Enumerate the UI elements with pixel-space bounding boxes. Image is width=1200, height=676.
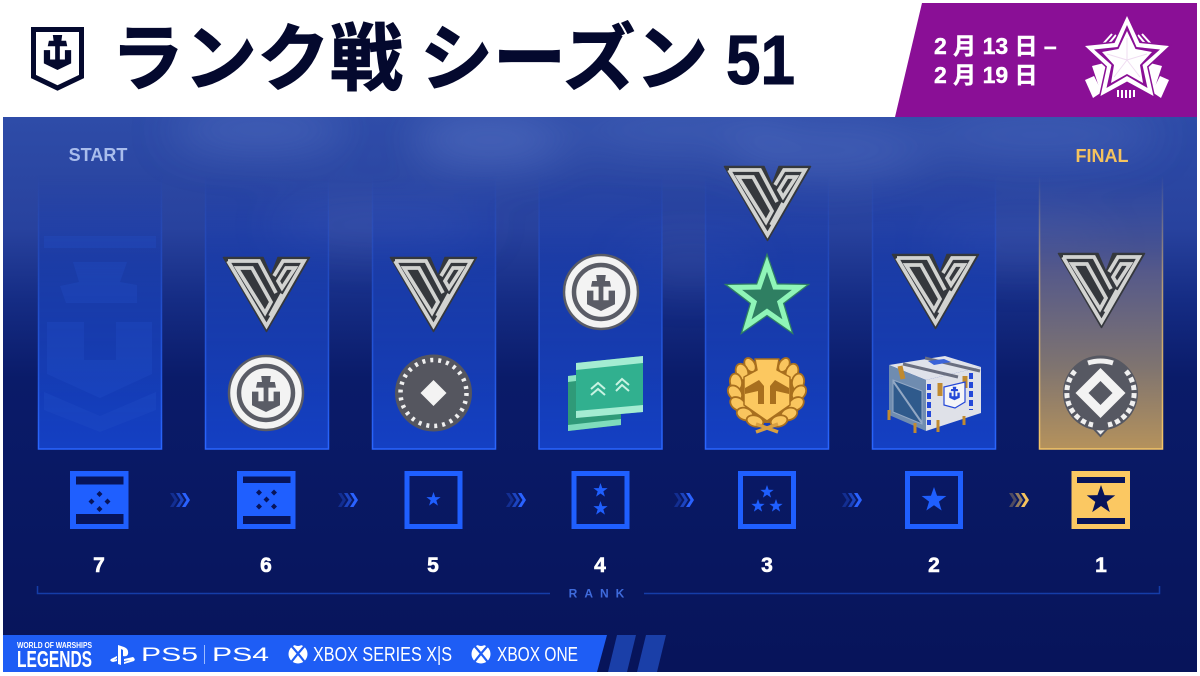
icon: anchor coin <box>229 356 303 430</box>
icon: V medal <box>892 254 978 328</box>
platform names: PS5 <box>141 645 198 666</box>
rank numbers: 2 <box>928 554 940 577</box>
dates text: 2 月 19 日 <box>934 62 1038 88</box>
rank icon 4 <box>574 474 627 526</box>
title <box>111 19 795 100</box>
rank icon 3 <box>740 474 794 526</box>
rank axis label: RANK <box>569 586 631 600</box>
icon: xbox series <box>288 644 308 664</box>
rank numbers: 1 <box>1095 554 1107 577</box>
icon: green signal flags <box>568 356 643 431</box>
label: start: START <box>69 145 127 165</box>
rank icon 5 <box>407 474 460 526</box>
platform names: PS4 <box>212 645 270 666</box>
chevrons 3 to 2 <box>842 493 862 507</box>
chevrons 4 to 3 <box>674 493 694 507</box>
game logo: WORLD OF WARSHIPS <box>17 641 93 650</box>
rank numbers <box>93 554 1107 577</box>
icon: V medal <box>1058 254 1144 328</box>
rank numbers: 3 <box>761 554 773 577</box>
column 5: rank 3 rewards <box>706 166 828 449</box>
panel: season dates <box>895 3 1197 117</box>
icon: V medal <box>224 258 310 332</box>
game logo <box>17 641 93 672</box>
column 4: rank 4 rewards <box>539 175 662 449</box>
icon: V medal <box>724 166 810 240</box>
platform names: XBOX SERIES X|S <box>313 644 452 666</box>
icon: anchor coin <box>564 255 638 329</box>
title: シーズン <box>420 19 708 100</box>
rank numbers: 5 <box>427 554 439 577</box>
icon: rope diamond coin <box>395 354 472 432</box>
rank icon 1 <box>1072 471 1130 529</box>
icon: laurel diamond coin <box>1063 356 1138 436</box>
rank numbers: 4 <box>594 554 606 577</box>
column 2: rank 6 rewards <box>206 175 328 449</box>
icon: season star emblem <box>1085 16 1169 98</box>
dates text: 2 月 13 日 – <box>934 33 1057 59</box>
ghost shield emblem <box>44 236 156 338</box>
platform names <box>141 644 578 666</box>
icon: V medal <box>390 258 476 332</box>
dates text <box>934 33 1057 88</box>
title: 51 <box>726 21 795 99</box>
game logo: LEGENDS <box>17 646 92 672</box>
icon: green star <box>735 264 799 326</box>
icon: supply crate <box>889 356 981 433</box>
chevrons 2 to 1 <box>1009 493 1029 507</box>
rank icon 6 <box>237 471 296 529</box>
column 6: rank 2 rewards <box>872 175 996 449</box>
icon: game shield logo <box>34 30 82 88</box>
column 3: rank 5 rewards <box>372 175 496 449</box>
title: ランク戦 <box>111 19 403 100</box>
cloud background <box>188 117 1126 259</box>
icon: xbox one <box>472 644 490 664</box>
rank axis line <box>38 586 1160 594</box>
icon: playstation <box>110 645 135 665</box>
rank numbers: 7 <box>93 554 105 577</box>
icon: gold laurel emblem <box>725 356 809 432</box>
chevrons 6 to 5 <box>338 493 358 507</box>
column 1: start rank 7 <box>38 175 162 449</box>
label: final: FINAL <box>1076 146 1128 166</box>
rank icon 7 <box>70 471 128 529</box>
rank numbers: 6 <box>260 554 272 577</box>
chevrons 7 to 6 <box>170 493 190 507</box>
column 7: final rank 1 rewards <box>1040 175 1162 449</box>
rank icon 2 <box>908 474 960 526</box>
chevrons 5 to 4 <box>506 493 526 507</box>
footer platforms bar <box>3 635 666 672</box>
platform names: XBOX ONE <box>497 644 578 666</box>
